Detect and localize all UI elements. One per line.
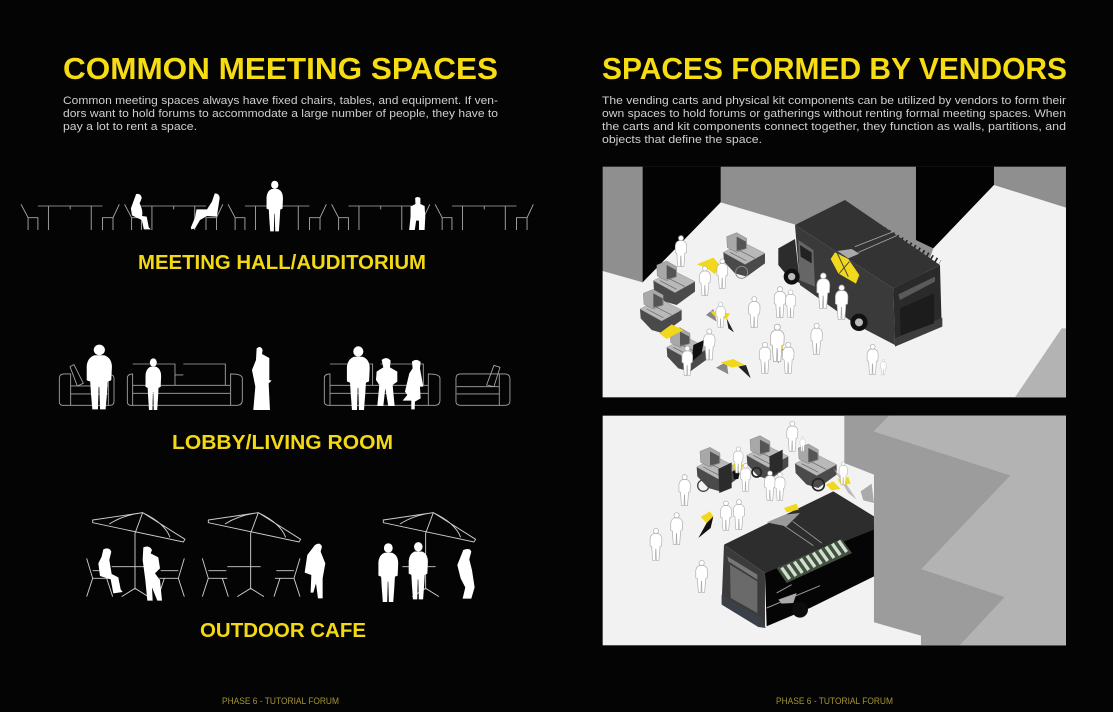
vending carts <box>697 436 874 503</box>
armchair left <box>59 365 114 405</box>
text block: common meeting spaces intro: dors want to hold forums to accommodate a large number of people, they have to <box>63 108 498 120</box>
sofa right <box>324 364 440 405</box>
text block: spaces formed by vendors intro: own spaces to hold forums or gatherings without renting formal meeting spaces. When <box>602 108 1066 120</box>
yellow kit components <box>659 258 784 378</box>
yellow awning <box>837 249 859 258</box>
panel: vendor truck scene two <box>603 416 1066 645</box>
person seated reclining <box>191 193 220 229</box>
heading: outdoor cafe: OUTDOOR CAFE <box>200 619 366 642</box>
people <box>87 345 112 409</box>
person seated left <box>131 194 151 229</box>
striped awning <box>777 539 852 583</box>
building shadow <box>874 416 1066 645</box>
umbrella set one <box>87 513 185 597</box>
illustration: meeting hall tables and people <box>21 181 533 231</box>
umbrella set two <box>202 513 301 597</box>
title: common meeting spaces: COMMON MEETING SPACES <box>63 51 498 86</box>
title: spaces formed by vendors: SPACES FORMED BY VENDORS <box>602 51 1067 86</box>
text block: spaces formed by vendors intro: the carts and kit components connect together, they function as walls, partitions, and <box>602 121 1066 133</box>
yellow kit components <box>698 464 851 538</box>
sofa centre <box>127 364 242 405</box>
vendor truck <box>778 200 942 347</box>
text block: common meeting spaces intro <box>63 95 498 133</box>
heading: lobby: LOBBY/LIVING ROOM <box>172 431 393 454</box>
text block: common meeting spaces intro: pay a lot to rent a space. <box>63 121 197 133</box>
text block: spaces formed by vendors intro <box>602 95 1066 146</box>
seated woman <box>98 548 123 593</box>
text block: spaces formed by vendors intro: The vending carts and physical kit components can be utilized by vendors to form their <box>602 95 1066 107</box>
man walking <box>305 544 325 598</box>
people at third umbrella <box>378 543 398 602</box>
panel: vendor truck scene one <box>603 167 1066 397</box>
umbrella set three <box>383 513 476 597</box>
person standing <box>267 181 283 231</box>
person seated front <box>409 197 425 230</box>
vendor truck <box>722 491 874 628</box>
people <box>650 421 848 592</box>
illustration: outdoor cafe umbrellas and people <box>87 513 476 602</box>
footer right: PHASE 6 - TUTORIAL FORUM <box>776 696 893 706</box>
heading: meeting hall: MEETING HALL/AUDITORIUM <box>138 251 426 274</box>
vending carts <box>640 233 765 372</box>
text block: common meeting spaces intro: Common meeting spaces always have fixed chairs, tables, and equipment. If ven- <box>63 95 498 107</box>
standing man <box>143 546 162 601</box>
armchair right <box>456 365 510 405</box>
text block: spaces formed by vendors intro: objects that define the space. <box>602 134 762 146</box>
people <box>675 236 886 376</box>
illustration: lobby sofas and people <box>59 345 510 410</box>
footer left: PHASE 6 - TUTORIAL FORUM <box>222 696 339 706</box>
